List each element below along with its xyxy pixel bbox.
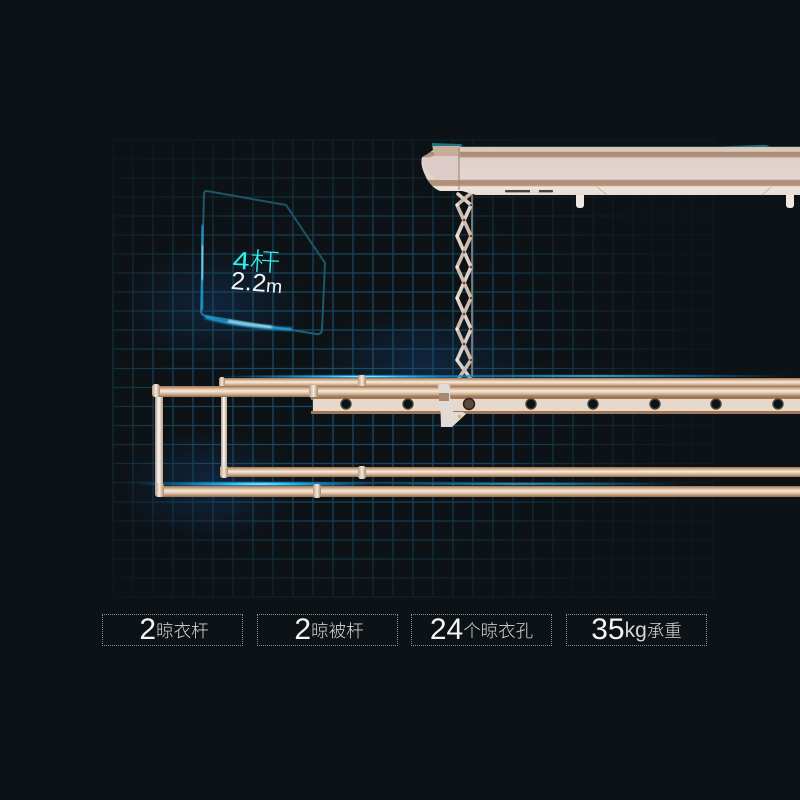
blue light streaks <box>135 374 795 487</box>
spec label: 2 quilt rods <box>257 614 398 646</box>
badge text: 4 rods: 4杆 <box>232 246 281 277</box>
end cap <box>433 146 460 157</box>
front upright <box>155 394 163 485</box>
bracket hangers <box>575 190 795 208</box>
panel: rod length badge <box>201 191 325 334</box>
main illustration <box>112 140 800 598</box>
spec label: 2 clothes rods: 2晾衣杆 <box>139 613 209 646</box>
badge outline <box>201 191 325 334</box>
control strip <box>505 190 553 192</box>
front lower rod <box>155 483 800 498</box>
spec label: 2 quilt rods: 2晾被杆 <box>294 613 364 646</box>
top edge highlight <box>432 143 800 148</box>
rear drying rod <box>219 375 800 388</box>
drying holes <box>341 399 783 409</box>
spec label: 35 kg load: 35kg承重 <box>591 613 682 646</box>
background glows <box>120 245 535 540</box>
rear quilt-rod upright <box>221 394 227 467</box>
blueprint grid <box>113 140 715 597</box>
spec label: 35 kg load <box>566 614 707 646</box>
drying rods <box>135 374 800 498</box>
scissor lift arm <box>457 194 472 378</box>
housing body <box>421 147 800 195</box>
perforated track <box>311 397 800 414</box>
lift bracket <box>438 384 474 427</box>
spec label: 2 clothes rods <box>102 614 243 646</box>
rear lower rod <box>220 465 800 479</box>
front upper rod <box>152 384 800 398</box>
motor housing <box>421 143 800 208</box>
badge text: 2.2 m: 2.2m <box>230 267 284 299</box>
spec label: 24 drying holes: 24个晾衣孔 <box>430 613 533 646</box>
badge light streak <box>202 225 292 329</box>
